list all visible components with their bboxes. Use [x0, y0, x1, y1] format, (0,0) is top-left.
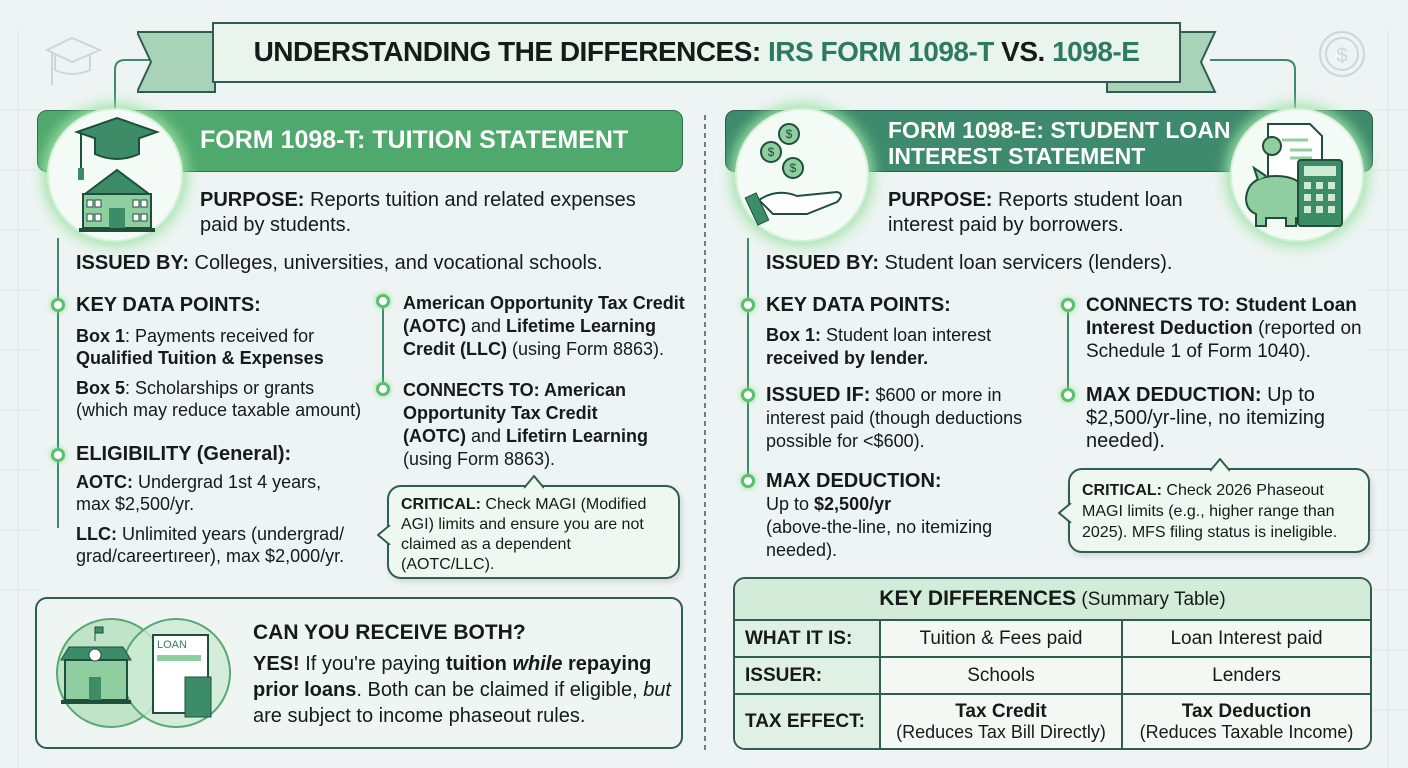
body text: YES! If you're paying tuition while repaying	[253, 653, 651, 675]
issued if	[766, 384, 1022, 451]
purpose text: PURPOSE: Reports student loan	[888, 189, 1183, 211]
connects to: Opportunity Tax Credit	[403, 403, 598, 423]
max deduction right: MAX DEDUCTION: Up to	[1086, 384, 1315, 406]
title: UNDERSTANDING THE DIFFERENCES: IRS FORM 1098-T VS. 1098-E	[254, 36, 1139, 67]
AOTC LLC credit text: Credit (LLC) (using Form 8863).	[403, 339, 664, 359]
connects to: Interest Deduction (reported on	[1086, 318, 1362, 339]
summary table: KEY DIFFERENCES (Summary Table)	[879, 587, 1226, 610]
AOTC LLC credit text	[403, 293, 685, 359]
callout: critical 1098-T	[387, 485, 680, 579]
summary table: Tax Credit	[955, 700, 1047, 722]
connects to: CONNECTS TO: Student Loan	[1086, 295, 1357, 316]
box 1 and box 5: Qualified Tuition & Expenses	[76, 348, 324, 368]
icon: hand with coins: $	[786, 127, 793, 141]
box 1 and box 5: (which may reduce taxable amount)	[76, 400, 361, 420]
connects to: Schedule 1 of Form 1040).	[1086, 341, 1311, 362]
aotc llc: AOTC: Undergrad 1st 4 years,	[76, 472, 321, 492]
icon: hand with coins: $	[768, 145, 775, 159]
icon: faint dollar coin	[1319, 31, 1365, 77]
icon: venn school loan: LOAN	[157, 639, 187, 651]
icon: piggy bank calculator	[1230, 108, 1364, 242]
summary table: Loan Interest paid	[1170, 628, 1323, 648]
box 1 and box 5: Box 5: Scholarships or grants	[76, 378, 314, 398]
issued if: possible for <$600).	[766, 431, 925, 451]
max deduction	[766, 470, 992, 560]
icon: faint dollar coin: $	[1336, 45, 1348, 67]
callout: critical 1098-E: CRITICAL: Check 2026 Phaseout	[1082, 482, 1324, 499]
connects to	[1086, 295, 1362, 362]
max deduction right	[1086, 384, 1325, 452]
summary table: Schools	[967, 664, 1035, 686]
callout: critical 1098-T: claimed as a dependent	[401, 536, 571, 553]
box 1: Box 1: Student loan interest	[766, 325, 991, 345]
box 1: received by lender.	[766, 348, 928, 368]
issued if: interest paid (though deductions	[766, 408, 1022, 428]
panel: 1098-T	[34, 96, 685, 584]
summary table: (Reduces Taxable Income)	[1140, 722, 1353, 742]
summary table: WHAT IT IS:	[745, 628, 852, 648]
header bar 1098-T	[37, 110, 683, 172]
connects to	[403, 380, 648, 469]
connects to: CONNECTS TO: American	[403, 380, 626, 400]
max deduction: needed).	[766, 540, 837, 560]
box 1 and box 5: Box 1: Payments received for	[76, 326, 314, 346]
panel: 1098-E	[722, 96, 1376, 560]
max deduction: Up to $2,500/yr	[766, 494, 891, 514]
heading 1098-E: FORM 1098-E: STUDENT LOAN	[888, 117, 1230, 143]
purpose text: PURPOSE: Reports tuition and related expenses	[200, 189, 636, 211]
callout: critical 1098-T: CRITICAL: Check MAGI (Modified	[401, 496, 646, 513]
max deduction right: $2,500/yr-line, no itemizing	[1086, 407, 1325, 429]
summary table: (Reduces Tax Bill Directly)	[896, 722, 1106, 742]
purpose text: paid by students.	[200, 214, 351, 236]
AOTC LLC credit text: (AOTC) and Lifetime Learning	[403, 316, 656, 336]
purpose text	[888, 189, 1183, 236]
heading 1098-E: INTEREST STATEMENT	[888, 143, 1145, 169]
panel: can you receive both	[35, 597, 683, 749]
aotc llc: grad/careertıreer), max $2,000/yr.	[76, 546, 344, 566]
summary table: Lenders	[1212, 664, 1281, 686]
issued by: ISSUED BY: Colleges, universities, and vocational schools.	[76, 252, 603, 274]
icon: grad cap school	[47, 108, 183, 242]
summary table: Tax Deduction	[1182, 700, 1311, 722]
body text	[253, 653, 672, 727]
aotc llc	[76, 472, 344, 566]
box 1 and box 5	[76, 326, 361, 420]
title banner	[137, 22, 1216, 93]
max deduction: (above-the-line, no itemizing	[766, 517, 992, 537]
callout: critical 1098-E: 2025). MFS filing status is ineligible.	[1082, 524, 1337, 541]
issued if: ISSUED IF: $600 or more in	[766, 384, 1002, 406]
box 1	[766, 325, 991, 368]
purpose text	[200, 189, 636, 236]
header bar 1098-E	[725, 110, 1373, 172]
AOTC LLC credit text: American Opportunity Tax Credit	[403, 293, 685, 313]
body text: are subject to income phaseout rules.	[253, 705, 585, 727]
icon: faint grad cap	[45, 37, 102, 85]
summary table: TAX EFFECT:	[745, 710, 865, 732]
icon: hand with coins: $	[790, 161, 797, 175]
heading 1098-T: FORM 1098-T: TUITION STATEMENT	[200, 126, 628, 154]
body text: prior loans. Both can be claimed if eligible, but	[253, 679, 671, 701]
heading 1098-E	[888, 117, 1230, 169]
aotc llc: max $2,500/yr.	[76, 494, 194, 514]
summary table	[733, 577, 1372, 750]
icon: hand with coins	[735, 108, 869, 242]
callout: critical 1098-E: MAGI limits (e.g., higher range than	[1082, 503, 1335, 520]
max deduction right: needed).	[1086, 430, 1165, 452]
connects to: (AOTC) and Lifetirn Learning	[403, 426, 648, 446]
aotc llc: LLC: Unlimited years (undergrad/	[76, 524, 344, 544]
connects to: (using Form 8863).	[403, 449, 555, 469]
purpose text: interest paid by borrowers.	[888, 214, 1124, 236]
summary table: ISSUER:	[745, 664, 822, 686]
max deduction: MAX DEDUCTION:	[766, 470, 942, 492]
callout: critical 1098-T: AGI) limits and ensure you are not	[401, 516, 644, 533]
issued by: ISSUED BY: Student loan servicers (lenders).	[766, 252, 1172, 274]
heading: can you receive both: CAN YOU RECEIVE BOTH?	[253, 621, 526, 644]
icon: venn school loan	[56, 618, 231, 728]
key data points: KEY DATA POINTS:	[76, 294, 261, 316]
callout: critical 1098-T: (AOTC/LLC).	[401, 556, 494, 573]
callout: critical 1098-E	[1068, 468, 1370, 553]
key data points: KEY DATA POINTS:	[766, 294, 951, 316]
eligibility: ELIGIBILITY (General):	[76, 443, 291, 465]
summary table: Tuition & Fees paid	[920, 628, 1082, 648]
